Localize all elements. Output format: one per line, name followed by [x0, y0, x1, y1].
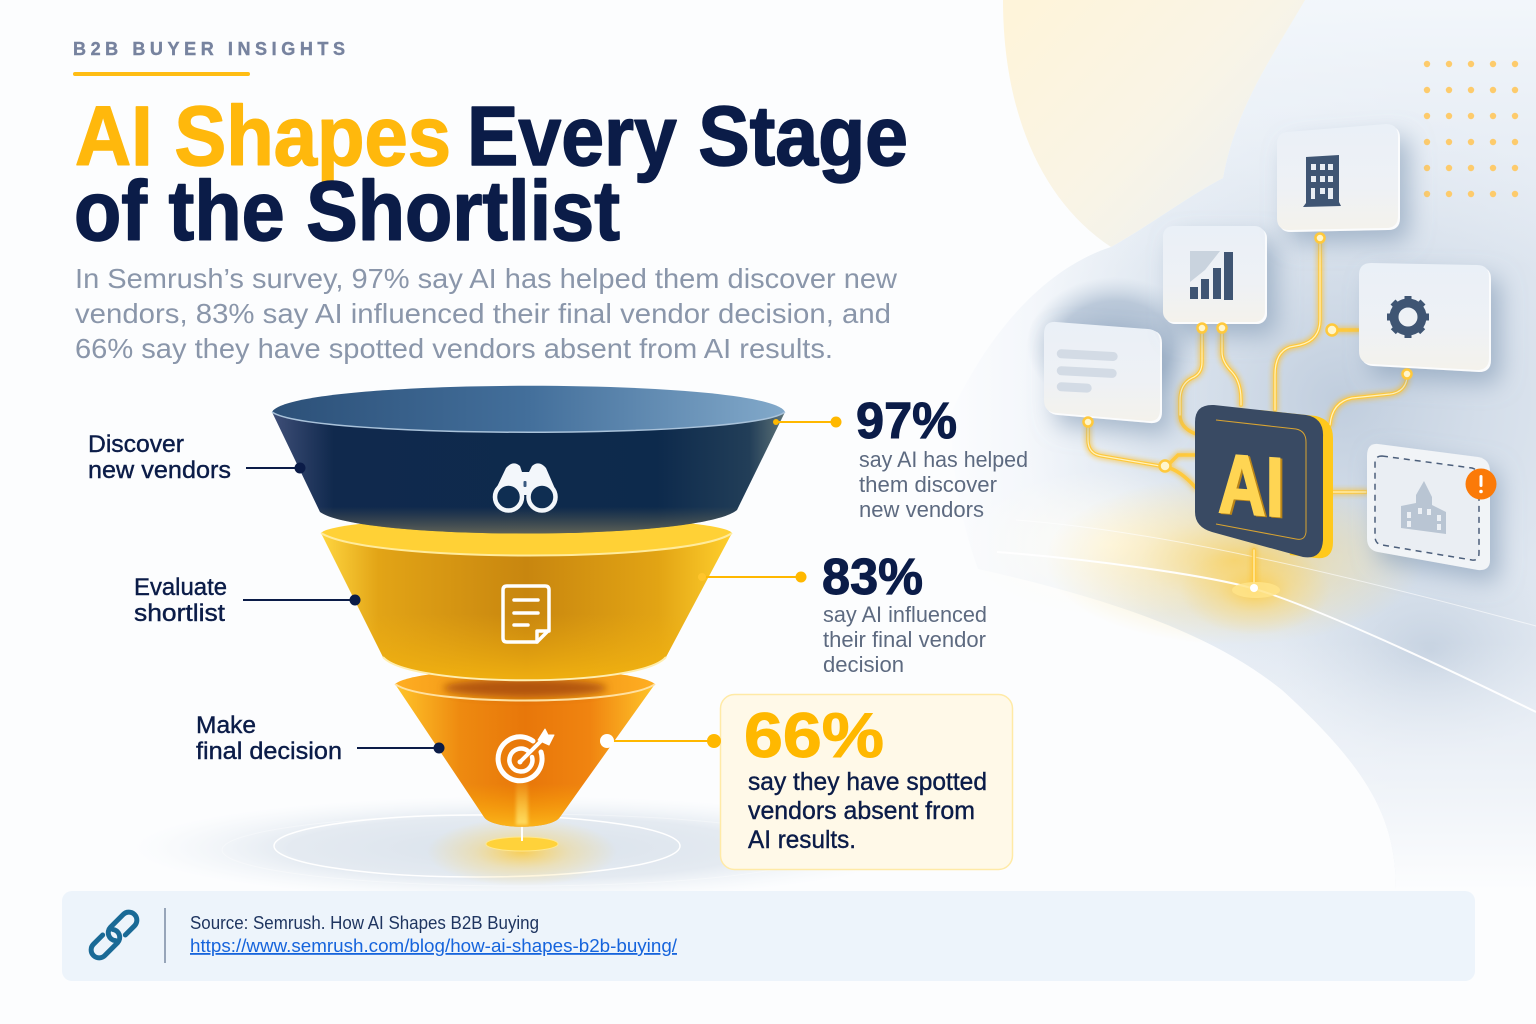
left label: evaluate: shortlist — [134, 600, 225, 627]
callout: 66% — [600, 694, 1012, 870]
stat: 97%: 97% — [856, 392, 957, 449]
card: text lines — [1044, 322, 1162, 423]
AI glow and light streaks — [960, 470, 1536, 712]
callout: 66%: say they have spotted — [748, 768, 987, 796]
icon: binoculars — [495, 463, 556, 510]
AI chip: AI — [1218, 436, 1284, 535]
card: settings gear — [1359, 263, 1491, 372]
circuit lines — [1088, 238, 1407, 592]
left label: decide: Make — [196, 712, 256, 739]
AI chip — [1195, 405, 1333, 558]
eyebrow heading: B2B BUYER INSIGHTS — [73, 39, 345, 59]
left label: decide — [196, 712, 444, 765]
source bar: https://www.semrush.com/blog/how-ai-shapes-b2b-buying/ — [190, 936, 677, 956]
left label: discover — [88, 431, 306, 484]
AI chip: AI — [1220, 437, 1286, 536]
stat: 83% — [698, 548, 987, 677]
title: of the Shortlist — [74, 164, 620, 258]
card: building — [1277, 124, 1400, 232]
left label: discover: Discover — [88, 431, 184, 458]
card: missing vendor alert — [1367, 444, 1496, 570]
title: Every Stage — [467, 89, 908, 183]
background shapes — [1003, 0, 1536, 848]
funnel — [272, 386, 785, 827]
stat: 83%: decision — [823, 652, 904, 677]
chip base node — [1232, 582, 1280, 598]
left label: discover: new vendors — [88, 457, 231, 484]
source bar — [62, 891, 1475, 981]
icon: alert badge — [1466, 468, 1496, 500]
stat: 97% — [773, 392, 1028, 522]
icon: document — [503, 586, 549, 642]
intro paragraph: In Semrush’s survey, 97% say AI has helped them discover new — [75, 263, 898, 294]
title: AI Shapes — [75, 89, 451, 183]
intro paragraph — [75, 263, 898, 364]
source bar: Source: Semrush. How AI Shapes B2B Buying — [190, 913, 539, 933]
funnel base glow — [132, 796, 912, 900]
intro paragraph: 66% say they have spotted vendors absent from AI results. — [75, 333, 833, 364]
callout: 66%: vendors absent from — [748, 797, 975, 825]
stat: 97%: say AI has helped — [859, 447, 1028, 472]
stat: 97%: them discover — [859, 472, 997, 497]
left label: evaluate — [134, 574, 360, 627]
stat: 83%: 83% — [822, 548, 923, 605]
connector nodes — [1084, 234, 1412, 472]
card: bar chart — [1163, 226, 1267, 324]
icon: target with arrow — [498, 729, 554, 781]
title — [74, 89, 908, 258]
funnel tier 2: amber — [321, 517, 732, 680]
stat: 83%: their final vendor — [823, 627, 986, 652]
callout: 66%: 66% — [744, 701, 884, 771]
funnel tier 3: orange — [395, 669, 655, 827]
left label: decide: final decision — [196, 738, 342, 765]
stat: 83%: say AI influenced — [823, 602, 987, 627]
left label: evaluate: Evaluate — [134, 574, 227, 601]
eyebrow heading — [73, 39, 345, 76]
icon: link — [88, 909, 140, 961]
intro paragraph: vendors, 83% say AI influenced their final vendor decision, and — [75, 298, 891, 329]
stat: 97%: new vendors — [859, 497, 984, 522]
callout: 66%: AI results. — [748, 826, 856, 854]
funnel tier 1: navy — [272, 386, 785, 534]
decorative dot grid — [1424, 61, 1518, 197]
